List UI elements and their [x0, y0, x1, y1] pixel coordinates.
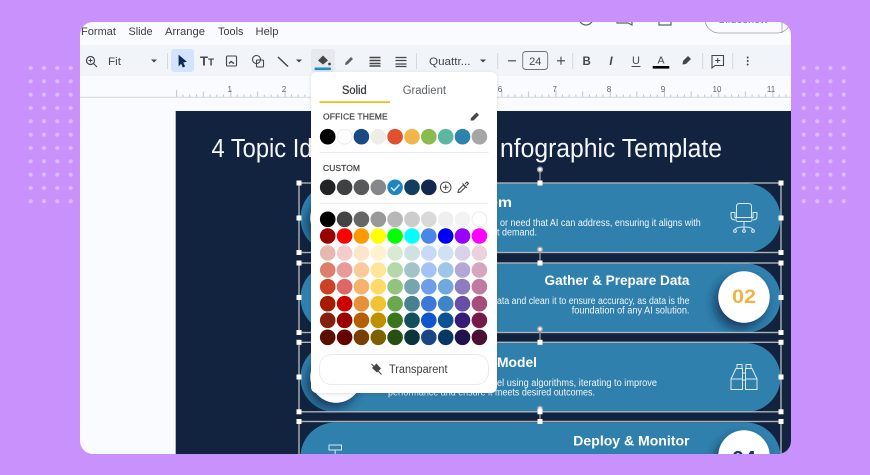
- slide title: nfographic Template: [500, 135, 722, 163]
- custom swatches: [320, 180, 437, 195]
- icon: eyedropper: [458, 182, 468, 192]
- office theme label: OFFICE THEME: [323, 112, 388, 122]
- tool: border weight: [370, 58, 380, 66]
- top bar icons: [580, 22, 788, 34]
- popup tabs: Solid: [342, 85, 367, 97]
- text format buttons: B: [583, 56, 591, 68]
- standard colour grid: [320, 212, 487, 345]
- ruler: 4: [390, 85, 395, 94]
- row 2 heading: Gather & Prepare Data: [544, 272, 690, 288]
- tool: image: [226, 56, 236, 66]
- row 2 body: [497, 296, 690, 317]
- tool: border colour: [345, 57, 353, 65]
- grid row 1 greys: [320, 212, 487, 227]
- menu bar: Slide: [128, 26, 152, 38]
- row 2 body: foundation of any AI solution.: [572, 306, 690, 317]
- resize handles: [296, 180, 784, 424]
- popup tabs: [320, 85, 447, 103]
- row 1 heading: em: [489, 194, 512, 210]
- row 3 pill: [300, 343, 780, 412]
- grid row 6 shades: [320, 296, 487, 312]
- row 4 heading: Deploy & Monitor: [573, 433, 690, 449]
- ruler: 1: [227, 85, 232, 94]
- rotate handles: [538, 167, 542, 411]
- icon: office chair: [731, 204, 757, 232]
- row 4 pill: [300, 422, 780, 454]
- text format buttons: A: [657, 54, 665, 66]
- grid row 3 tints: [320, 245, 487, 261]
- toolbar: [80, 45, 791, 76]
- slide title: 4 Topic Id: [212, 135, 312, 163]
- grid row 4 tints: [320, 262, 487, 278]
- row 4 number badge: [710, 430, 770, 454]
- icon: no fill bucket: [372, 364, 382, 374]
- office theme swatches: [320, 129, 487, 144]
- row 3 body: el using algorithms, iterating to improve: [497, 378, 657, 389]
- slide title: [212, 138, 721, 162]
- row 2 number badge: [718, 271, 770, 323]
- icon: edit theme pencil: [470, 112, 479, 120]
- menu bar: Help: [256, 26, 278, 38]
- fill colour popup panel: [311, 72, 497, 393]
- tool: shapes: [252, 56, 264, 67]
- popup tabs: Gradient: [403, 85, 447, 97]
- tool: line: [278, 57, 302, 66]
- row 4 number badge: 04: [732, 448, 756, 470]
- more options: [747, 56, 749, 66]
- transparent button: [320, 354, 488, 384]
- tool: fill colour active: [311, 49, 335, 72]
- row 3 heading: Model: [497, 354, 537, 370]
- decorative dot grid left: [24, 61, 77, 208]
- top bar icons: Slideshow: [718, 14, 768, 26]
- tool: text box: TT: [200, 54, 214, 68]
- font selector: Quattr...: [429, 56, 470, 68]
- ruler: 5: [444, 85, 449, 94]
- menu bar: Format: [81, 26, 116, 38]
- text format buttons: [583, 54, 691, 69]
- toolbar dividers: [168, 53, 733, 69]
- ruler: 2: [282, 85, 287, 94]
- row 3 body: performance and ensure it meets desired outcomes.: [388, 388, 595, 399]
- font selector: [430, 58, 486, 68]
- decorative dot grid right: [794, 61, 847, 208]
- font size control: [508, 52, 565, 70]
- menu bar: Arrange: [165, 26, 205, 38]
- grid row 8 shades: [320, 330, 487, 345]
- menu bar: [82, 27, 278, 38]
- row 2 pill: [300, 264, 780, 332]
- row 3 body: [388, 378, 657, 399]
- zoom control: Fit: [108, 56, 121, 68]
- row 1 body: or need that AI can address, ensuring it aligns with: [500, 218, 701, 229]
- icon: add custom colour: [440, 182, 451, 193]
- ruler: 10: [713, 85, 722, 94]
- ruler: 8: [607, 85, 612, 94]
- ruler: 7: [552, 85, 557, 94]
- row 2 number badge: 02: [732, 287, 756, 308]
- font size control: 24: [529, 56, 541, 68]
- row 1 body: [497, 218, 700, 236]
- custom label: CUSTOM: [323, 163, 360, 173]
- ruler: 11: [767, 85, 776, 94]
- text format buttons: I: [609, 56, 613, 68]
- ruler: 6: [498, 85, 503, 94]
- grid row 2 pure hues: [320, 228, 487, 244]
- add comment button: [712, 56, 724, 68]
- selection boxes: [296, 167, 784, 475]
- menu bar: Tools: [218, 26, 244, 38]
- icon: binoculars: [731, 364, 757, 390]
- grid row 5 tints: [320, 279, 487, 295]
- transparent button: Transparent: [389, 364, 448, 376]
- grid row 7 shades: [320, 312, 487, 328]
- ruler: [80, 86, 791, 98]
- text format buttons: U: [632, 55, 640, 67]
- icon: signpost: [329, 445, 342, 456]
- row 2 body: ata and clean it to ensure accuracy, as data is the: [497, 296, 690, 307]
- tool: border dash: [396, 58, 406, 66]
- ruler: 3: [336, 85, 341, 94]
- zoom control: [86, 56, 157, 68]
- ruler: 9: [661, 85, 666, 94]
- row 1 pill: [300, 184, 780, 252]
- row 1 body: t demand.: [497, 228, 537, 239]
- slide: [176, 111, 792, 475]
- tool: select: [171, 49, 194, 72]
